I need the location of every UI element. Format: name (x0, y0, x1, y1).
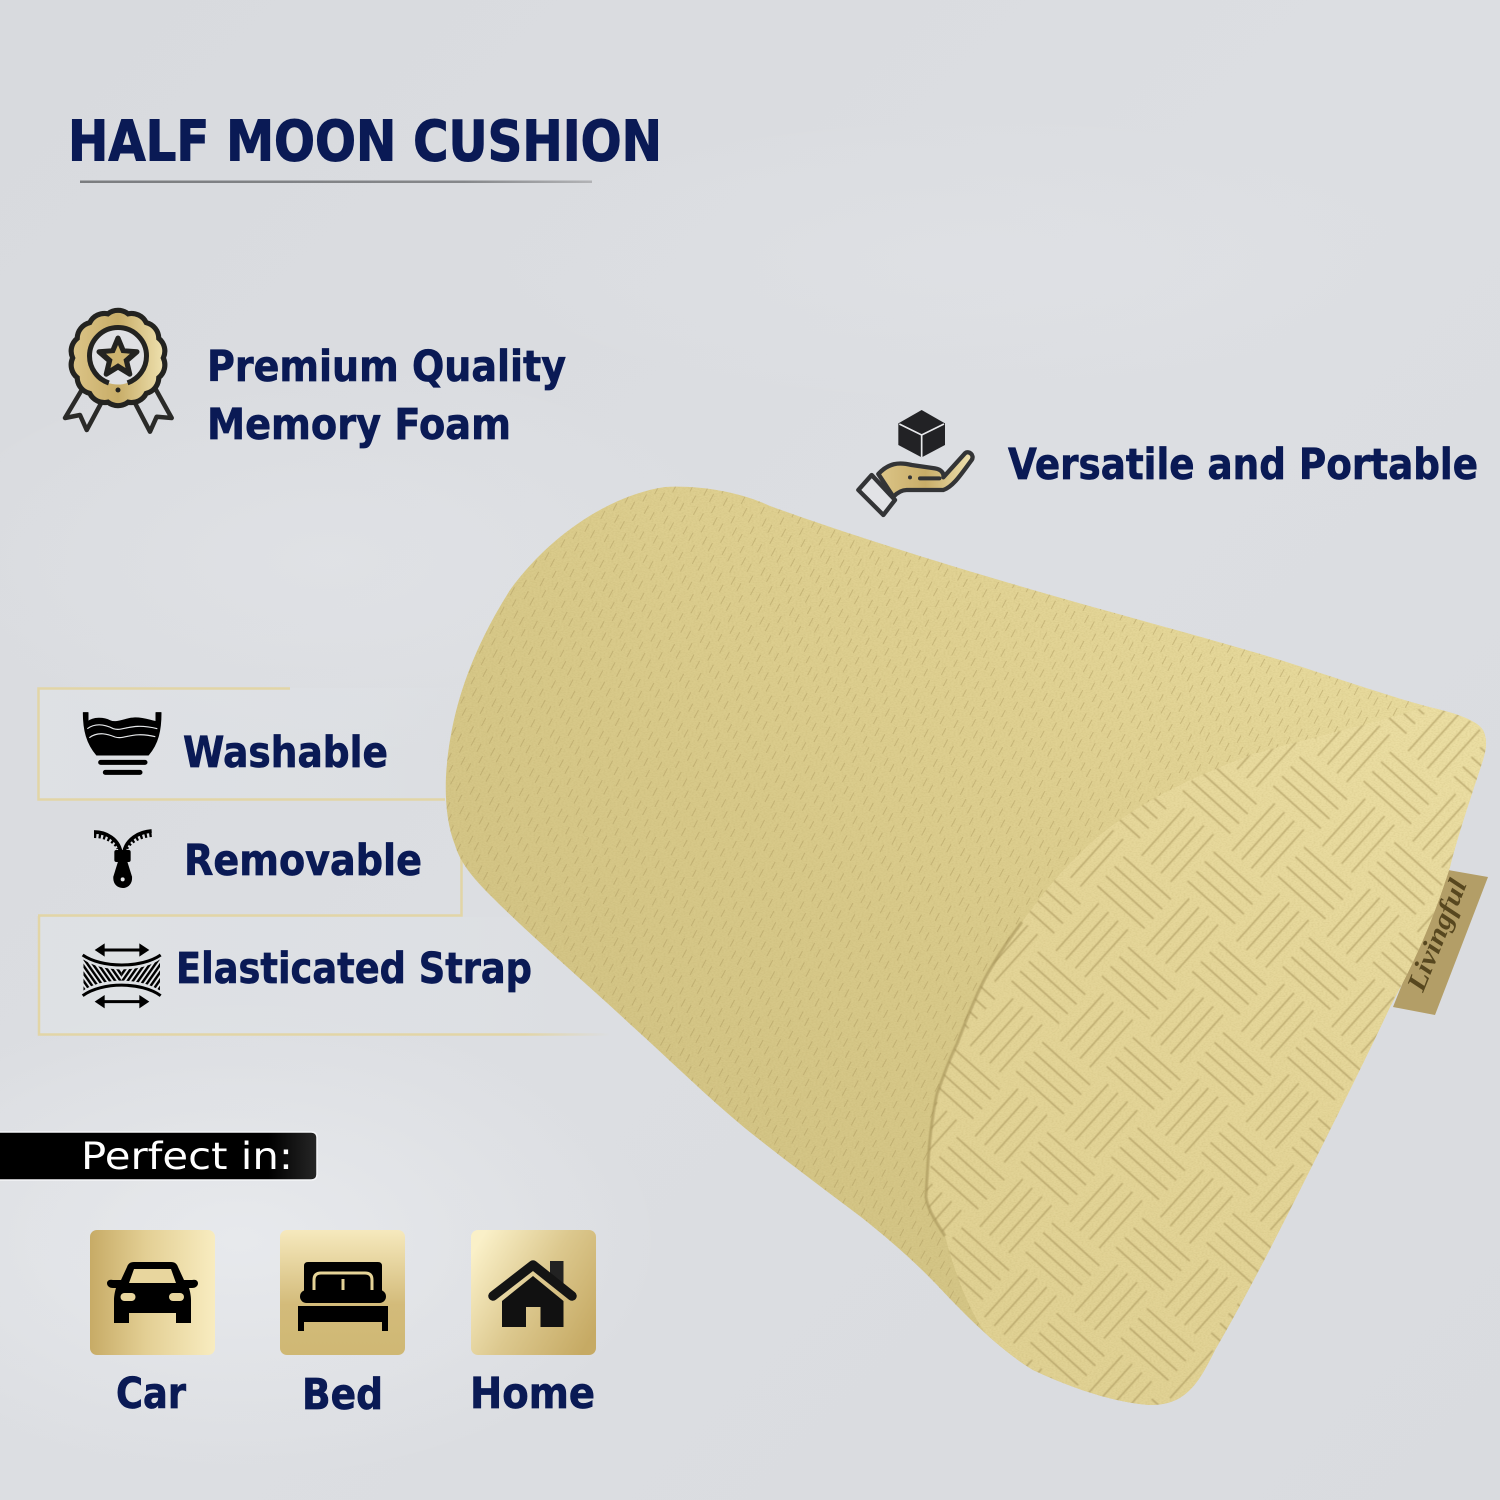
icon: wash basin (83, 713, 161, 772)
icon: car (107, 1262, 198, 1323)
tag brand text: Livingful (1400, 874, 1473, 996)
label: memory foam: Memory Foam (207, 400, 511, 450)
panel: removable box lines (38, 800, 462, 916)
tile: car (90, 1230, 215, 1355)
title underline (80, 180, 592, 183)
feature: premium quality memory foam (65, 310, 566, 450)
icon: award badge (65, 310, 172, 432)
label: elasticated strap: Elasticated Strap (176, 944, 532, 994)
feature: removable (94, 831, 422, 888)
feature: elasticated strap (83, 943, 532, 1008)
banner text: Perfect in: (81, 1135, 293, 1178)
icon: bed (298, 1262, 388, 1331)
cushion fabric noise (430, 470, 1500, 1420)
title: HALF MOON CUSHION (68, 110, 662, 174)
tile: bed (280, 1230, 405, 1355)
use case: bed (280, 1230, 405, 1420)
cushion end face (926, 700, 1500, 1430)
label: car: Car (116, 1369, 187, 1419)
banner: perfect in (0, 1132, 317, 1180)
cushion tag (1393, 870, 1488, 1015)
panel: washable box lines (38, 688, 458, 800)
tile: home (471, 1230, 596, 1355)
use case: home (470, 1230, 596, 1419)
panel: elasticated strap box lines (39, 916, 610, 1034)
product: half moon cushion (430, 470, 1500, 1430)
feature: versatile and portable (858, 410, 1478, 515)
label: home: Home (470, 1369, 595, 1419)
cushion body (430, 470, 1500, 1420)
icon: zipper (94, 831, 152, 888)
label: washable: Washable (183, 728, 388, 778)
icon: home (493, 1261, 572, 1327)
label: premium quality: Premium Quality (207, 342, 566, 392)
icon: hand holding box (858, 410, 973, 515)
feature: washable (83, 713, 388, 778)
label: removable: Removable (184, 836, 422, 886)
label: bed: Bed (302, 1370, 383, 1420)
icon: stretch fabric (83, 943, 161, 1008)
use case: car (90, 1230, 215, 1419)
